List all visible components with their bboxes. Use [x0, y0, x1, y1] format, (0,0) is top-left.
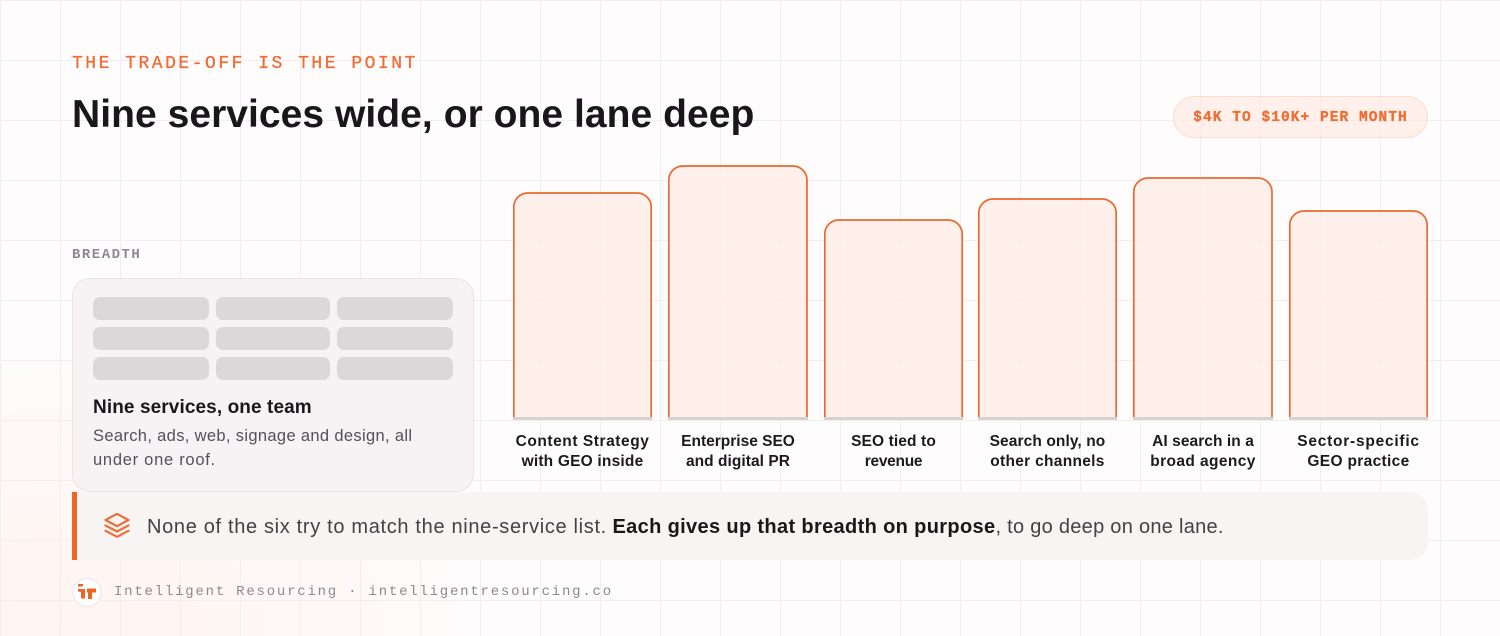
bar label: SEO tied to revenue: SEO tied to	[851, 433, 936, 450]
card heading: Nine services, one team	[93, 397, 312, 418]
bar label: Enterprise SEO: and digital PR	[686, 453, 790, 470]
bar: Content Strategy	[514, 193, 651, 418]
eyebrow: THE TRADE-OFF IS THE POINT	[72, 54, 418, 74]
bar label: Content Strategy: with GEO inside	[522, 453, 643, 470]
icon: layers	[104, 512, 130, 538]
bar: Enterprise SEO	[669, 166, 807, 418]
bar label: Sector-specific	[1297, 433, 1420, 470]
card description	[93, 427, 412, 469]
bar label: AI search: broad agency	[1150, 453, 1256, 470]
bar label: Sector-specific: Sector-specific	[1297, 433, 1420, 450]
bar label: Enterprise SEO	[681, 433, 795, 470]
title: Nine services wide, or one lane deep	[72, 93, 754, 136]
card description: under one roof.	[93, 451, 216, 469]
footer text: Intelligent Resourcing · intelligentresourcing.co	[114, 584, 613, 600]
bar label: Search only: other channels	[990, 453, 1105, 470]
service chips grid	[93, 297, 453, 380]
price pill	[1173, 96, 1428, 138]
bar label: Enterprise SEO: Enterprise SEO	[681, 433, 795, 450]
bar label: AI search	[1150, 433, 1256, 470]
bar: SEO tied to revenue	[825, 220, 962, 418]
callout text: None of the six try to match the nine-service list. Each gives up that breadth on purpose, to go deep on one lane.	[147, 516, 1224, 538]
bar: AI search	[1134, 178, 1272, 418]
bar label: Search only: Search only, no	[990, 433, 1105, 450]
bar label: Sector-specific: GEO practice	[1307, 453, 1410, 470]
bar label: Content Strategy: Content Strategy	[516, 433, 649, 450]
bar: Sector-specific	[1290, 211, 1427, 418]
panel: breadth card	[72, 278, 474, 492]
bar label: Search only	[990, 433, 1105, 470]
bar label: SEO tied to revenue	[851, 433, 936, 470]
price pill: $4K TO $10K+ PER MONTH	[1193, 110, 1408, 126]
bar label: AI search: AI search in a	[1152, 433, 1254, 450]
callout	[72, 492, 1428, 560]
breadth label: BREADTH	[72, 247, 141, 263]
bar label: SEO tied to revenue: revenue	[865, 453, 922, 470]
chart: six specialist bars	[513, 165, 1428, 418]
bar label: Content Strategy	[516, 433, 649, 470]
bar: Search only	[979, 199, 1116, 418]
icon: brand logo	[72, 578, 102, 607]
card description: Search, ads, web, signage and design, all	[93, 427, 412, 445]
